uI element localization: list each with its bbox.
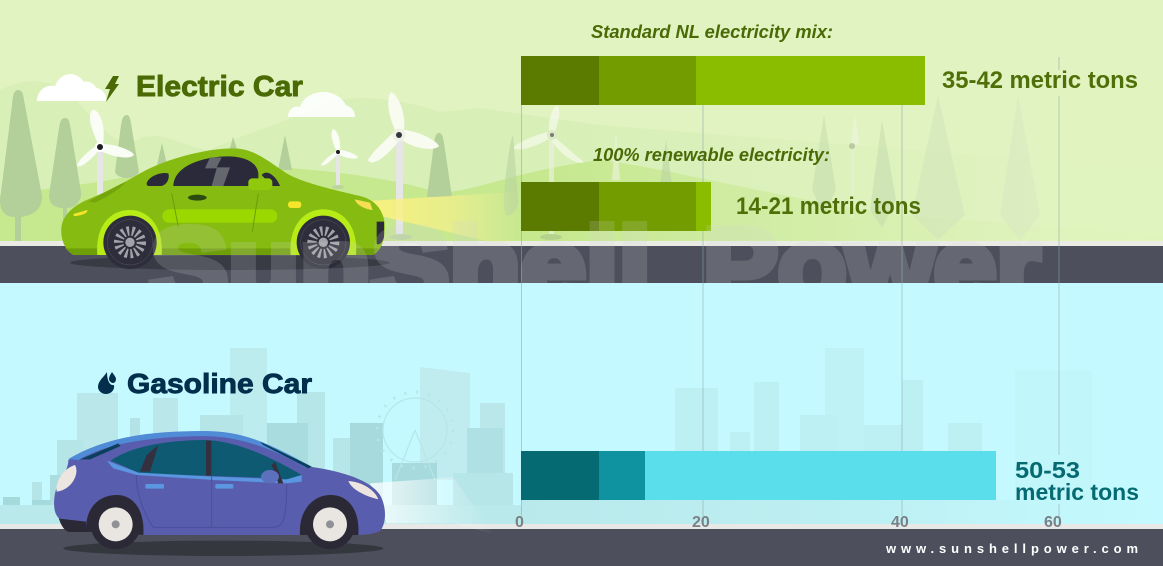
electric car illustration (61, 148, 520, 270)
mirror, handle, stripe (248, 178, 272, 190)
windows (111, 440, 302, 480)
website url: www.sunshellpower.com (885, 541, 1138, 556)
axis labels: 20 (692, 514, 710, 531)
watermark: Sunshell Power: SunShell (150, 207, 651, 325)
heading: Gasoline Car: Gasoline Car (127, 368, 312, 399)
bar: standard NL electricity mix (521, 56, 925, 105)
panel: gasoline car background (0, 283, 1163, 524)
wheel front (305, 499, 355, 549)
wheel front (297, 216, 350, 269)
clouds (37, 74, 355, 117)
icon: lightning bolt (105, 76, 119, 102)
city skyline right, faded (521, 348, 1161, 524)
value: 50-53 metric tons (1015, 457, 1139, 505)
ferris wheel (377, 392, 453, 480)
axis labels: 0 (515, 514, 524, 531)
lights (288, 201, 301, 208)
label: standard NL electricity mix: Standard NL electricity mix: (591, 22, 833, 42)
rear bumper (58, 517, 90, 532)
watermark: Sunshell Power: Power (703, 207, 1040, 325)
value: 35-42 metric tons: 35-42 metric tons (942, 67, 1138, 94)
value: 50-53 metric tons: 50-53 (1015, 457, 1080, 483)
gasoline car illustration (54, 431, 493, 556)
panel: electric car background (0, 0, 1163, 283)
trees left (0, 90, 452, 241)
label: 100% renewable electricity: 100% renewable electricity: (593, 145, 830, 165)
icon: fuel drops (98, 372, 116, 394)
watermark: Sunshell Power (148, 221, 1042, 283)
road: bottom (0, 524, 1163, 566)
heading: Electric Car: Electric Car (136, 71, 303, 103)
wheel rear (91, 499, 141, 549)
headlight beam (370, 477, 493, 534)
chart: emissions bars (515, 56, 1062, 531)
value: 14-21 metric tons: 14-21 metric tons (736, 193, 921, 220)
wind turbines (77, 92, 439, 240)
car body (54, 432, 385, 535)
city skyline left (0, 348, 521, 524)
bar: gasoline car (521, 451, 996, 500)
car body (61, 148, 385, 255)
faded scenery behind chart (504, 95, 1040, 240)
windows (173, 156, 258, 186)
lights (56, 465, 76, 492)
wheel rear (103, 216, 157, 269)
wheel arches (97, 210, 162, 255)
shadow (70, 255, 390, 270)
road: top (0, 241, 1163, 283)
axis labels: 60 (1044, 514, 1062, 531)
axis labels: 40 (891, 514, 909, 531)
wheel arches (86, 495, 143, 535)
axis labels (515, 514, 1062, 531)
bar: 100% renewable electricity (521, 182, 711, 231)
headlight beam (357, 192, 520, 243)
shadow (63, 541, 383, 556)
mirror and door details (261, 470, 279, 483)
value: 50-53 metric tons: metric tons (1015, 479, 1139, 505)
